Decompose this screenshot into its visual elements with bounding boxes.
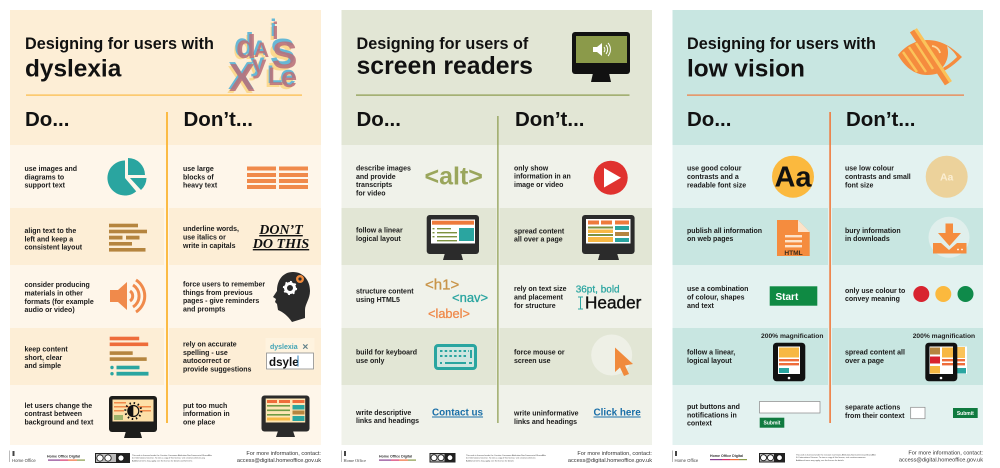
do: short: keep content — [24, 346, 68, 354]
do: buttons: notifications in — [687, 412, 737, 420]
dont: only colour: convey meaning — [845, 296, 900, 303]
do: short: short, clear — [24, 355, 63, 362]
do: describe: for video — [356, 190, 386, 198]
do: linear: logical layout — [356, 236, 401, 243]
dont: too much: one place — [183, 420, 215, 426]
footer: low vision: 4.0 International License. To view a copy of this license, visit creativecommons — [796, 456, 865, 459]
do: buttons: put buttons and — [687, 404, 740, 411]
dont: heavy text: use large — [183, 166, 214, 173]
sample: separated submit: Submit — [957, 411, 974, 417]
do: contrast: use good colour — [687, 166, 742, 172]
icon: text blocks — [247, 166, 308, 189]
sample: html tags: <h1> — [425, 276, 459, 294]
footer: dyslexia: Home Office Digital — [47, 454, 80, 458]
footer: low vision: This work is licensed under the Creative Commons Attribution-NonCommercial-ShareAlike — [796, 454, 877, 456]
icon: Aa strong: Aa — [774, 162, 812, 194]
heading: low vision: Designing for users with — [687, 35, 876, 53]
dont: links: links and headings — [514, 419, 577, 426]
dont: memory: and prompts — [183, 306, 225, 314]
icon: jumbled letters: i — [270, 15, 277, 42]
footer: dyslexia: Additional terms may apply; see the licence for details and full terms — [132, 459, 192, 462]
dont: spread: all over a page — [514, 236, 563, 244]
icon: jumbled letters: X — [229, 57, 255, 100]
do: keyboard: build for keyboard — [356, 350, 417, 356]
heading: dyslexia — [25, 35, 214, 82]
panel: screen readers — [342, 10, 652, 464]
footer: dyslexia — [10, 450, 321, 464]
dont: spread: over a page — [845, 358, 884, 365]
do: images: support text — [24, 182, 66, 190]
do: combination: of colour, shapes — [687, 294, 745, 302]
Don't heading: Don’t... — [846, 108, 915, 131]
do: combination: use a combination — [687, 286, 748, 293]
icon: jumbled letters: i — [269, 19, 276, 46]
heading: dyslexia: dyslexia — [25, 56, 122, 82]
heading: low vision — [687, 35, 876, 82]
dont: downloads: bury information — [845, 228, 901, 235]
icon: grouped bars — [110, 337, 148, 376]
dont: memory: force users to remember — [183, 282, 265, 288]
sample: bad link: Click here — [594, 408, 641, 418]
dont: only image: only show — [514, 166, 549, 172]
icon: jumbled letters: d — [233, 29, 253, 66]
footer: low vision: Additional terms may apply; see the licence for details — [796, 459, 844, 462]
icon: colour dots — [913, 286, 974, 302]
do: align: align text to the — [24, 228, 76, 235]
panel: dyslexia — [10, 10, 321, 464]
heading: dyslexia: Designing for users with — [25, 35, 214, 53]
sample: header — [576, 284, 642, 312]
footer: dyslexia: 4.0 International License. To view a copy of this license, visit creativecommons.org — [132, 457, 205, 460]
sample: header: Header — [585, 292, 642, 312]
do: contrast: background and text — [24, 420, 94, 426]
dont: spelling: provide suggestions — [183, 366, 252, 374]
Don't heading: Don’t... — [184, 108, 253, 131]
footer: low vision — [672, 450, 983, 464]
icon: jumbled letters: X — [227, 59, 253, 102]
dont: spelling: rely on accurate — [183, 342, 237, 348]
heading: screen readers: screen readers — [356, 53, 533, 80]
dont: heavy text: heavy text — [183, 182, 218, 190]
sample: search field: dsyle — [269, 356, 299, 369]
do: html5: structure content — [356, 288, 414, 296]
dont: underline: write in capitals — [182, 243, 236, 250]
dont: memory: pages - give reminders — [183, 298, 259, 305]
icon: jumbled letters: L — [265, 65, 280, 93]
icon: Aa strong — [772, 156, 814, 198]
do: align: left and keep a — [24, 236, 73, 244]
sample: search field: ✕ — [302, 342, 309, 352]
icon: monitor clutter — [262, 396, 310, 437]
footer: screen readers: access@digital.homeoffice.gov.uk — [568, 458, 652, 464]
sample: dont do this — [252, 223, 309, 252]
sample: alt tag: <alt> — [424, 162, 483, 190]
do: images: use images and — [24, 166, 77, 173]
do: publish: publish all information — [687, 228, 762, 235]
icon: speaker — [110, 280, 145, 312]
icon: jumbled letters: y — [250, 47, 265, 77]
dont: low contrast: font size — [845, 182, 873, 190]
do: align: consistent layout — [24, 244, 83, 252]
icon: jumbled letters: S — [268, 37, 293, 79]
footer: dyslexia: This work is licensed under the Creative Commons Attribution-NonCommercial-ShareAlike — [132, 454, 213, 457]
sample: dont do this: DON’T — [258, 223, 304, 238]
dont: spelling: autocorrect or — [183, 358, 231, 365]
footer: dyslexia: Home Office — [12, 458, 36, 463]
icon: tablet linear — [761, 333, 823, 381]
do: publish: on web pages — [687, 236, 733, 243]
footer: low vision: For more information, contact: — [908, 450, 983, 456]
footer: screen readers: Home Office — [344, 458, 366, 463]
icon: play button — [594, 161, 628, 195]
heading: screen readers — [356, 35, 533, 80]
footer: screen readers: Home Office Digital — [379, 454, 412, 458]
icon: Aa weak — [926, 156, 968, 198]
icon: jumbled letters: i — [272, 18, 279, 45]
do: buttons: context — [687, 420, 713, 428]
footer: screen readers: This work is licensed under the Creative Commons Attribution-NonCommercial-ShareAlike — [466, 454, 547, 457]
icon: jumbled letters: e — [281, 62, 297, 94]
dont: mouse: force mouse or — [514, 350, 565, 356]
do: describe: and provide — [356, 174, 396, 181]
dont: links: write uninformative — [513, 410, 579, 418]
do: short: and simple — [24, 363, 61, 370]
dont: low contrast: use low colour — [845, 166, 894, 172]
icon: jumbled letters: S — [270, 32, 295, 74]
heading: low vision: low vision — [687, 56, 805, 82]
footer: screen readers: For more information, contact: — [577, 451, 652, 457]
dont: separate: from their context — [845, 413, 905, 420]
do: keyboard: use only — [356, 358, 385, 365]
icon: jumbled letters: e — [278, 64, 294, 96]
panel: low vision — [672, 10, 983, 464]
icon: spread monitor — [582, 215, 635, 260]
dont: spread: spread content all — [845, 350, 905, 356]
Don't heading: Don’t... — [515, 108, 584, 131]
dont: only colour: only use colour to — [845, 288, 905, 295]
do: combination: and text — [687, 303, 715, 310]
do: describe: describe images — [356, 166, 411, 172]
dont: only image: image or video — [514, 182, 563, 189]
icon: crossed eye — [898, 30, 962, 84]
footer: dyslexia: access@digital.homeoffice.gov.uk — [237, 458, 321, 464]
icon: left aligned bars — [109, 224, 147, 252]
do: linear: follow a linear — [356, 228, 403, 234]
sample: good link: Contact us — [432, 408, 484, 418]
icon: mouse pointer — [591, 334, 633, 376]
icon: jumbled letters: y — [248, 51, 263, 81]
icon: jumbled letters: L — [267, 61, 282, 89]
icon: jumbled letters: d — [236, 28, 256, 65]
dont: text size: and placement — [514, 294, 564, 302]
dont: spelling: spelling - use — [183, 350, 228, 357]
icon: html file: HTML — [784, 250, 803, 257]
sample: html tags: <nav> — [452, 290, 488, 305]
sample: input with submit: Submit — [764, 421, 781, 427]
icon: jumbled letters: A — [252, 37, 267, 60]
sample: search field: dyslexia — [270, 344, 298, 351]
icon: jumbled letters — [227, 15, 297, 102]
icon: jumbled letters: L — [268, 63, 283, 91]
icon: pie chart — [107, 158, 146, 195]
icon: monitor contrast — [109, 396, 157, 438]
dont: separate: separate actions — [845, 404, 900, 412]
icon: tablet spread — [913, 333, 975, 381]
icon: tablet linear: 200% magnification — [761, 333, 823, 340]
button: start: Start — [776, 292, 799, 303]
Do heading: Do... — [25, 108, 69, 131]
do: html5: using HTML5 — [356, 297, 400, 304]
icon: head with gears — [273, 272, 310, 322]
icon: keyboard — [436, 346, 476, 368]
Do heading: Do... — [356, 108, 401, 131]
do: describe: transcripts — [356, 182, 392, 189]
footer: low vision: access@digital.homeoffice.gov.uk — [899, 458, 983, 464]
dont: text size: for structure — [514, 303, 556, 310]
dont: underline: use italics or — [183, 234, 226, 242]
dont: heavy text: blocks of — [183, 174, 214, 182]
do: linear layout: follow a linear, — [687, 350, 735, 356]
sample: html tags — [425, 276, 488, 321]
footer: low vision: Home Office — [674, 458, 699, 463]
icon: linear monitor — [427, 215, 479, 260]
button: start — [770, 286, 817, 306]
heading: screen readers: Designing for users of — [356, 35, 529, 53]
dont: spread: spread content — [514, 228, 565, 236]
icon: html file — [777, 220, 810, 257]
footer: screen readers — [342, 450, 652, 464]
dont: text size: rely on text size — [514, 286, 567, 293]
sample: header: 36pt, bold — [576, 284, 620, 296]
footer: screen readers: 4.0 International License. To view a copy of this license, visit creativecommons — [466, 457, 535, 460]
sample: dont do this: DO THIS — [252, 237, 309, 252]
icon: jumbled letters: y — [252, 49, 267, 79]
dont: too much: put too much — [183, 403, 227, 410]
sample: separated submit — [911, 407, 978, 419]
icon: tablet spread: 200% magnification — [913, 333, 975, 340]
dont: mouse: screen use — [514, 358, 551, 365]
do: contrast: contrasts and a — [687, 174, 739, 181]
do: contrast: contrast between — [24, 411, 82, 418]
do: contrast: readable font size — [687, 182, 746, 190]
footer: screen readers: Additional terms may apply; see the licence for details — [466, 459, 514, 462]
footer: dyslexia: For more information, contact: — [246, 451, 321, 457]
do: linear layout: logical layout — [687, 358, 732, 365]
Do heading: Do... — [687, 108, 731, 131]
do: images: diagrams to — [24, 174, 64, 182]
icon: monitor with speaker — [572, 32, 630, 82]
do: formats: consider producing — [24, 282, 90, 289]
icon: jumbled letters: A — [251, 41, 266, 64]
dont: too much: information in — [183, 411, 230, 418]
do: formats: materials in other — [24, 290, 83, 298]
icon: jumbled letters: S — [272, 35, 297, 77]
footer: low vision: Home Office Digital — [710, 454, 743, 458]
icon: jumbled letters: d — [234, 26, 254, 63]
do: links: write descriptive — [355, 410, 411, 417]
dont: low contrast: contrasts and small — [845, 174, 911, 181]
icon: jumbled letters: X — [228, 55, 254, 98]
do: contrast: let users change the — [24, 403, 92, 410]
dont: downloads: in downloads — [845, 236, 890, 243]
dont: only image: information in an — [514, 174, 571, 180]
sample: html tags: <label> — [428, 306, 470, 321]
do: formats: formats (for example — [24, 299, 94, 306]
do: formats: audio or video) — [24, 307, 75, 314]
dont: underline: underline words, — [183, 226, 239, 233]
icon: jumbled letters: e — [280, 60, 296, 92]
do: links: links and headings — [356, 418, 419, 425]
sample: input with submit — [760, 402, 820, 428]
icon: jumbled letters: A — [254, 39, 269, 62]
icon: Aa weak: Aa — [940, 172, 954, 184]
icon: download — [928, 217, 970, 258]
sample: search field — [266, 338, 314, 370]
dont: memory: things from previous — [183, 290, 253, 297]
